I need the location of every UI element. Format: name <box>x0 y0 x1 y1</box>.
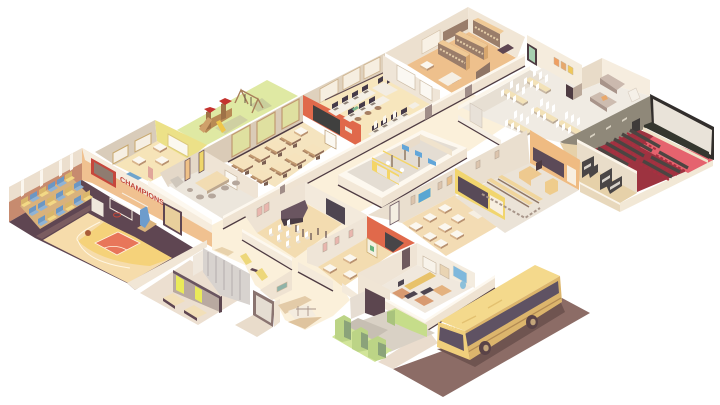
scoreboard <box>91 196 104 218</box>
cafeteria low wall <box>458 115 501 146</box>
middle classroom <box>368 130 530 256</box>
school bus <box>437 265 565 367</box>
toilet block <box>338 130 467 208</box>
green hedges and walkway <box>332 308 435 362</box>
art blackboard <box>385 232 404 252</box>
classroom windows <box>232 99 299 157</box>
gym back-left wall <box>9 148 82 222</box>
lab side wall <box>383 55 440 110</box>
auditorium seats <box>598 130 688 177</box>
toilet back walls <box>380 135 420 161</box>
classroom desks <box>231 127 324 186</box>
stage <box>640 135 713 173</box>
meeting table <box>195 171 229 191</box>
cafeteria floor <box>460 68 650 143</box>
swing set <box>235 90 263 113</box>
art tables <box>343 254 357 264</box>
world map poster <box>418 187 431 204</box>
student tables <box>409 204 465 249</box>
bulletin board <box>168 134 188 157</box>
kitchen counters <box>600 74 625 90</box>
gym lower wall <box>127 240 207 290</box>
corridor wall doors <box>280 84 472 201</box>
music chairs and stands <box>269 219 310 249</box>
basketball hoop <box>110 193 157 232</box>
yellow board wall <box>455 168 505 220</box>
bookshelves <box>438 18 504 80</box>
lectern box <box>545 178 558 195</box>
music blackboard <box>326 198 345 225</box>
office front walls <box>385 300 425 331</box>
projection booth <box>560 143 637 203</box>
green exit door <box>527 43 537 66</box>
cafeteria framed pictures <box>554 57 573 75</box>
office entrance wall with door <box>358 273 390 300</box>
meeting room doors <box>185 158 190 181</box>
easel <box>367 238 377 258</box>
auditorium <box>560 94 714 212</box>
auditorium door <box>632 118 640 137</box>
office door back <box>402 247 410 270</box>
grand piano <box>281 200 308 221</box>
library <box>385 7 525 93</box>
orange board wall <box>530 130 580 190</box>
teacher desk <box>468 207 490 219</box>
left hedge <box>332 326 392 362</box>
meeting room <box>160 148 258 219</box>
lecture room <box>455 130 580 233</box>
benches <box>163 293 185 306</box>
cafeteria tables <box>501 68 583 137</box>
gym double door <box>163 202 182 236</box>
music room <box>242 182 367 270</box>
champions banner: CHAMPIONS <box>120 174 164 207</box>
break room <box>95 120 207 182</box>
blue tile panels <box>402 144 436 166</box>
cafeteria <box>458 35 650 146</box>
classroom door <box>390 201 399 225</box>
flipchart <box>325 130 336 149</box>
music pictures <box>257 202 269 217</box>
cafeteria nook walls <box>582 58 602 90</box>
entrance step <box>235 315 273 337</box>
wall pictures <box>411 150 499 205</box>
orange wall with blackboard <box>303 95 361 148</box>
meeting whiteboard <box>225 170 237 190</box>
long classroom <box>160 95 337 187</box>
access road <box>378 330 438 369</box>
art wall pictures <box>323 229 353 252</box>
basketball <box>85 230 91 236</box>
lockers <box>173 273 220 312</box>
vending cabinets <box>566 84 573 100</box>
break room windows <box>113 133 151 164</box>
music front wall <box>242 231 292 270</box>
climbing tower and slide <box>199 98 232 133</box>
library windows <box>422 30 440 54</box>
gym top wall band <box>148 180 212 225</box>
entrance door <box>253 290 275 327</box>
film projectors <box>582 156 622 194</box>
benches <box>482 175 543 218</box>
auditorium back wall <box>560 95 652 155</box>
gym <box>9 148 212 290</box>
red floor <box>592 130 713 192</box>
entrance stairs <box>278 296 312 314</box>
gym dark floor <box>9 180 197 290</box>
bleachers <box>20 171 93 229</box>
movie screen <box>650 94 714 160</box>
lab windows <box>320 57 380 103</box>
lab computer rows <box>328 76 420 138</box>
gym back-right wall <box>82 148 212 247</box>
cubicles <box>372 150 419 185</box>
basketball court <box>43 213 172 283</box>
shower curtains <box>203 248 250 305</box>
art room <box>298 216 415 303</box>
corridor floor <box>212 92 515 330</box>
bus sign: SCHOOL <box>442 322 460 333</box>
lecture desk <box>519 166 542 186</box>
lobby sofas <box>214 247 268 281</box>
central corridor wall <box>223 55 525 229</box>
auditorium base <box>580 182 620 212</box>
office room <box>350 243 495 332</box>
right hedge <box>387 308 427 337</box>
parking lot <box>378 298 590 397</box>
office posters <box>423 256 436 274</box>
computer lab <box>303 53 440 148</box>
office desks <box>392 272 466 306</box>
entrance <box>235 270 322 337</box>
bus wheels <box>479 315 538 355</box>
art room front walls <box>298 262 360 303</box>
playground <box>177 80 298 146</box>
library tables <box>420 61 434 71</box>
locker room <box>140 248 250 325</box>
honours board <box>91 158 116 188</box>
